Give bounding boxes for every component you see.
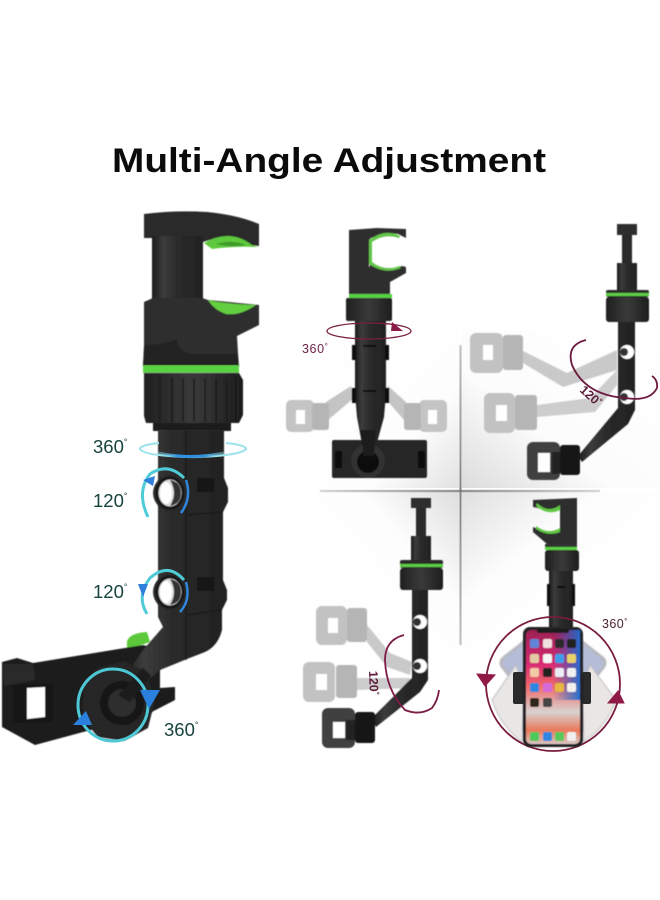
label: 120 upper: ° (124, 491, 128, 501)
knurled nut (144, 373, 243, 431)
ghost arm positions (303, 606, 412, 702)
label: 120 lower: 120 (93, 581, 124, 602)
rotation arc: lower 120 hinge (138, 570, 188, 614)
label: 120 upper: 120 (93, 490, 124, 511)
panel: 360 phone rotation (477, 498, 628, 751)
panel: 120 upper hinge (470, 224, 657, 480)
panel: 120 lower hinge (303, 498, 443, 748)
label: 360: ° (325, 342, 328, 351)
lower clamp and neck (143, 298, 259, 366)
panel backgrounds (318, 330, 660, 652)
label: 360 ball: ° (195, 720, 199, 730)
label: 120: ° (372, 691, 381, 695)
rotation arc (571, 340, 657, 399)
label: 360 neck: 360 (93, 436, 124, 457)
rotation arc (385, 635, 439, 713)
hinge buttons (153, 475, 189, 610)
label: 360: 360 (602, 617, 624, 631)
arm (322, 498, 443, 748)
top clamp arm (144, 211, 259, 300)
label: 360 ball: 360 (164, 719, 195, 740)
side grips (513, 672, 591, 704)
app icons (530, 639, 576, 741)
phone (523, 627, 583, 747)
green band (143, 365, 239, 373)
panel: 360 neck rotation (286, 228, 447, 478)
rotation ring (477, 617, 624, 751)
rotation ring: 360 neck (140, 443, 246, 457)
jointed body arm (120, 430, 228, 700)
rotation arc: upper 120 hinge (142, 469, 188, 517)
arm (527, 224, 649, 480)
panel: main phone holder (2, 211, 259, 745)
label: 360: ° (624, 617, 628, 626)
label: 360 neck: ° (124, 437, 128, 447)
title: Multi-Angle Adjustment (112, 142, 546, 180)
label: 120 lower: ° (124, 582, 128, 592)
label: 120: ° (596, 397, 604, 406)
side bracket (2, 632, 175, 745)
ghost clamps (286, 386, 447, 432)
rotation ring: ball joint (73, 669, 160, 741)
ghost arm positions (470, 333, 617, 433)
ball joint (82, 661, 155, 741)
rotation ring (327, 322, 411, 339)
ghost phones behind (492, 626, 616, 747)
label: 360: 360 (302, 342, 325, 356)
holder above phone (533, 498, 579, 628)
label: 120: 120 (577, 383, 602, 407)
holder (332, 228, 427, 478)
label: 120: 120 (366, 671, 381, 692)
